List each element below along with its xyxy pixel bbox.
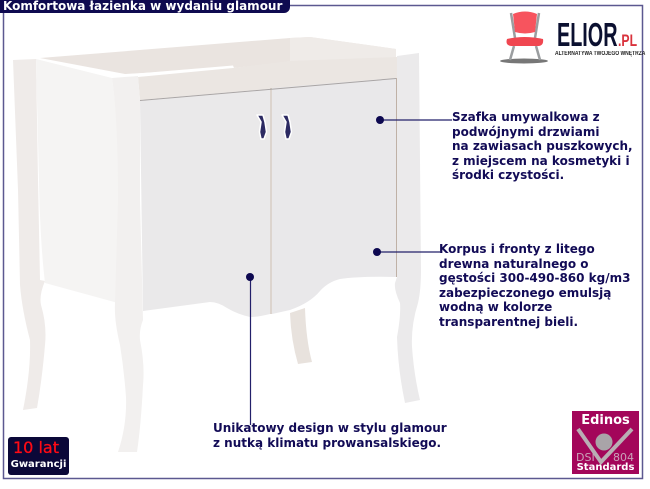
text: cabinet description: Szafka umywalkowa z: [452, 110, 600, 124]
logo wordmark: ELIOR: [557, 16, 618, 53]
icon: red chair: [500, 12, 548, 64]
text: design description: Unikatowy design w stylu glamour: [213, 421, 447, 435]
back legs: [13, 59, 46, 410]
badge left code: DSI: [576, 451, 595, 464]
badge right code: 804: [613, 451, 634, 464]
text: cabinet description: [452, 110, 633, 182]
callout lines: [250, 120, 452, 425]
text: body and fronts description: transparentnej bieli.: [439, 315, 578, 329]
logo: Elior: [500, 12, 646, 64]
text: body and fronts description: zabezpieczonego emulsją: [439, 286, 611, 300]
left door: [140, 89, 270, 317]
top front rail: [138, 57, 397, 100]
callout dots: [246, 116, 384, 281]
text: cabinet description: na zawiasach puszkowych,: [452, 139, 633, 153]
side panel: [36, 59, 118, 303]
door handles: [257, 115, 292, 139]
top back rail: [40, 37, 396, 74]
text: body and fronts description: gęstości 300-490-860 kg/m3: [439, 271, 630, 285]
badge years: 10 lat: [13, 438, 59, 457]
front left post and leg: [112, 76, 144, 452]
right door: [272, 78, 396, 314]
text: body and fronts description: Korpus i fronty z litego: [439, 242, 595, 256]
text: design description: [213, 421, 447, 450]
right post and leg: [395, 53, 421, 403]
badge: Edinos standards: [572, 411, 639, 474]
text: body and fronts description: drewna naturalnego o: [439, 257, 589, 271]
logo domain suffix: .PL: [618, 31, 637, 50]
text: design description: z nutką klimatu prowansalskiego.: [213, 436, 441, 450]
text: body and fronts description: [439, 242, 630, 329]
badge icon: [576, 428, 634, 465]
logo tagline: ALTERNATYWA TWOJEGO WNĘTRZA: [555, 51, 645, 57]
text: cabinet description: podwójnymi drzwiami: [452, 125, 599, 139]
text: cabinet description: środki czystości.: [452, 168, 564, 182]
badge caption: Gwarancji: [11, 459, 66, 470]
text: cabinet description: z miejscem na kosmetyki i: [452, 154, 630, 168]
badge name: Edinos: [581, 413, 630, 428]
text: body and fronts description: wodną w kolorze: [439, 300, 552, 314]
badge: 10 year warranty: [8, 437, 69, 475]
badge caption: Standards: [577, 462, 634, 473]
cabinet: [13, 37, 421, 452]
